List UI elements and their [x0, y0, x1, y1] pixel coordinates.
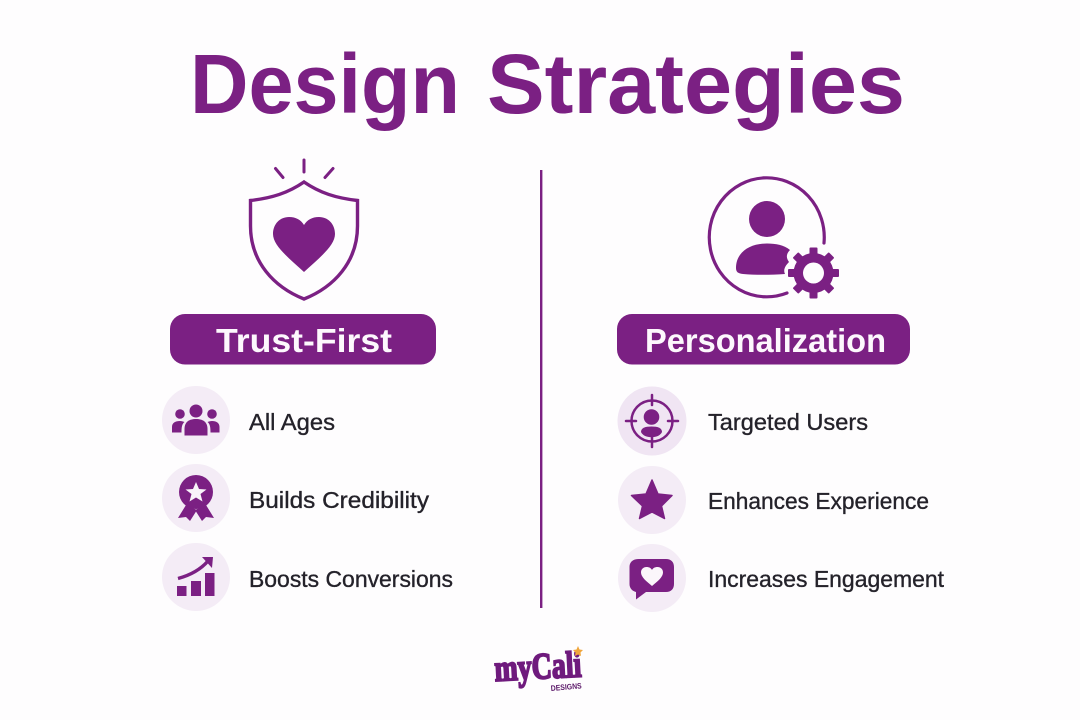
icon: star [632, 480, 672, 518]
item: Increases Engagement: Increases Engagement [708, 566, 944, 592]
panel: trust-first [162, 160, 453, 611]
panel: personalization [617, 178, 944, 612]
center divider [540, 170, 542, 608]
title: Design [190, 37, 460, 131]
heading: Personalization: Personalization [645, 322, 886, 359]
heading: Personalization [617, 314, 910, 364]
item: Boosts Conversions: Boosts Conversions [249, 566, 453, 592]
item: Targeted Users: Targeted Users [708, 409, 868, 435]
icon: growth chart [177, 557, 214, 596]
item: Boosts Conversions [162, 543, 453, 611]
title [190, 37, 905, 131]
item: Targeted Users [618, 386, 868, 456]
heading: Trust-First [170, 314, 436, 364]
item: Builds Credibility: Builds Credibility [249, 487, 429, 513]
item: Enhances Experience: Enhances Experience [708, 488, 929, 514]
icon: award ribbon [178, 475, 214, 521]
logo: myCali Designs: DESIGNS [550, 681, 583, 693]
item: Enhances Experience [618, 466, 929, 534]
heading: Trust-First: Trust-First [216, 322, 392, 359]
title: Strategies [487, 37, 905, 131]
icon: shield with heart [250, 160, 358, 299]
icon: group of people [172, 404, 220, 436]
item: All Ages: All Ages [249, 409, 335, 435]
item: All Ages [162, 386, 335, 454]
icon: target user [626, 395, 678, 447]
icon: user with gear [709, 178, 839, 298]
icon: speech bubble with heart [630, 559, 674, 600]
item: Builds Credibility [162, 464, 429, 532]
logo: myCali Designs: myCali [493, 644, 582, 690]
item: Increases Engagement [618, 544, 944, 612]
